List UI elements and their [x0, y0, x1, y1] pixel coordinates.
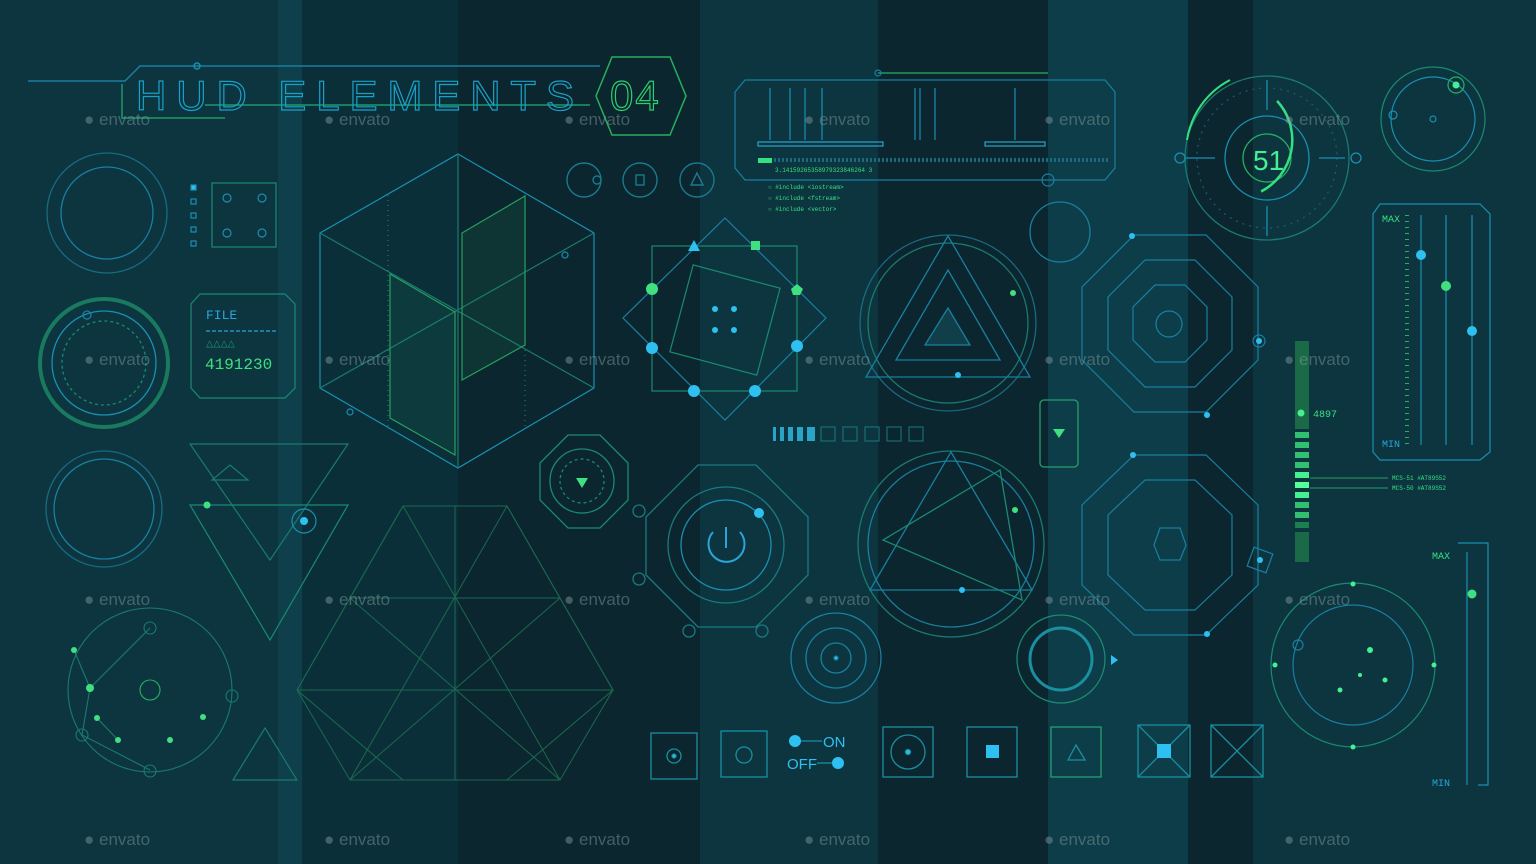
panel: slider max min: MIN: [1382, 440, 1400, 451]
gauge 51: [1175, 76, 1361, 240]
bar meter 4897: [1295, 341, 1446, 562]
small circles bottom mid: [791, 202, 1118, 703]
bar meter 4897: MCS-50 #AT89S52: [1392, 485, 1446, 492]
watermarks: ● envato: [84, 110, 150, 129]
title: [28, 57, 686, 135]
watermarks: ● envato: [1044, 350, 1110, 369]
panel: code bar: ○ #include <iostream>: [768, 184, 844, 191]
watermarks: ● envato: [1284, 590, 1350, 609]
panel: slider max min: MAX: [1382, 215, 1400, 226]
rotating squares node: [623, 218, 826, 420]
network circle left bottom: [68, 608, 238, 777]
bottom icon row: OFF: [787, 756, 817, 773]
watermarks: ● envato: [324, 110, 390, 129]
watermarks: ● envato: [804, 110, 870, 129]
slider bottom right: [1432, 543, 1488, 790]
panel: slider max min: [1373, 204, 1490, 460]
watermarks: ● envato: [84, 830, 150, 849]
icons c-c-c: [567, 163, 714, 197]
panel: code bar: [735, 70, 1115, 213]
panel: file: △△△△: [206, 337, 236, 351]
watermarks: ● envato: [324, 590, 390, 609]
watermarks: ● envato: [84, 590, 150, 609]
panel: file: 4191230: [205, 356, 272, 374]
watermarks: ● envato: [564, 590, 630, 609]
watermarks: ● envato: [1044, 590, 1110, 609]
panel: code bar: ○ #include <vector>: [768, 206, 837, 213]
progress boxes: [773, 427, 923, 441]
watermarks: ● envato: [564, 110, 630, 129]
watermarks: ● envato: [84, 350, 150, 369]
bottom icon row: ON: [823, 734, 846, 751]
watermarks: ● envato: [804, 830, 870, 849]
panel: file: FILE: [206, 308, 237, 323]
octagons right: [1082, 233, 1273, 637]
slider bottom right: MIN: [1432, 779, 1450, 790]
constellation circle: [1271, 582, 1436, 750]
bar meter 4897: 4897: [1313, 410, 1337, 421]
watermarks: ● envato: [564, 350, 630, 369]
phone icon: [1040, 400, 1078, 467]
triangles left: [190, 444, 348, 780]
slider bottom right: MAX: [1432, 552, 1450, 563]
watermarks: ● envato: [804, 590, 870, 609]
title: 04: [610, 72, 661, 119]
watermarks: ● envato: [1044, 110, 1110, 129]
watermarks: ● envato: [804, 350, 870, 369]
watermarks: ● envato: [1044, 830, 1110, 849]
panel: code bar: ○ #include <fstream>: [768, 195, 840, 202]
power button octagon: [633, 465, 808, 637]
watermarks: ● envato: [564, 830, 630, 849]
small squares list: [191, 183, 276, 247]
bar meter 4897: MCS-51 #AT89S52: [1392, 475, 1446, 482]
triangle circle top: [860, 235, 1036, 411]
triangle circle bottom: [858, 451, 1044, 637]
watermarks: ● envato: [1284, 110, 1350, 129]
watermarks: ● envato: [1284, 830, 1350, 849]
cube: [320, 154, 594, 468]
watermarks: ● envato: [324, 350, 390, 369]
bottom icon row: [651, 725, 1263, 779]
panel: code bar: 3.14159265358979323846264 3: [775, 167, 873, 174]
watermarks: [84, 110, 1350, 849]
left circles: [40, 153, 168, 567]
small octagon with arrow: [540, 435, 628, 528]
geometric grid: [297, 506, 613, 780]
panel: file: [191, 294, 295, 398]
watermarks: ● envato: [324, 830, 390, 849]
radar circle top right: [1381, 67, 1485, 171]
title: HUD ELEMENTS: [136, 72, 574, 119]
gauge 51: 51: [1253, 145, 1284, 176]
watermarks: ● envato: [1284, 350, 1350, 369]
